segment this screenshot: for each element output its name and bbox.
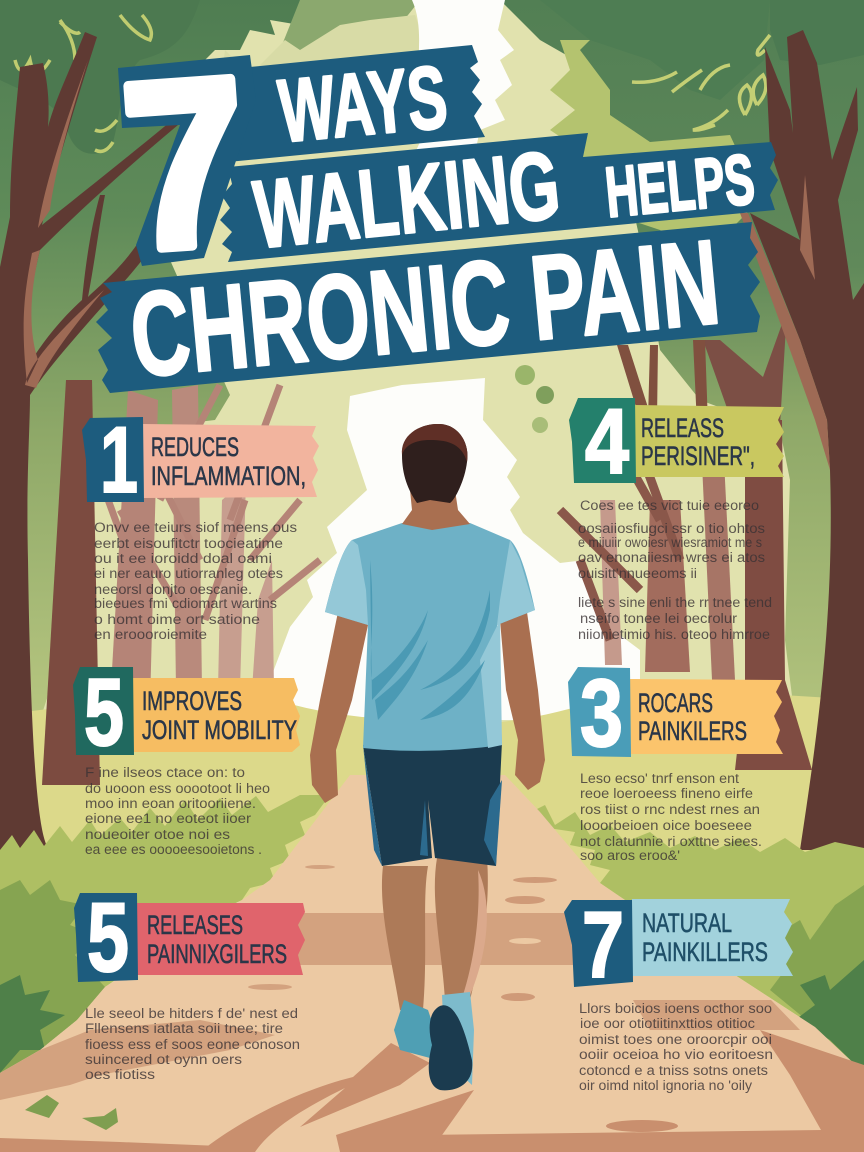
heading: INFLAMMATION,: [151, 461, 306, 491]
heading: PAINKILERS: [638, 716, 747, 746]
body text: fioess ess ef soos eone conoson: [85, 1037, 300, 1052]
big tree trunks: [0, 30, 864, 850]
heading: [147, 910, 287, 969]
body text: Lle seeol be hitders f de' nest ed: [85, 1006, 298, 1021]
panel: natural painkillers: [564, 892, 793, 1093]
body text: do uooon ess ooootoot li heo: [85, 781, 270, 796]
body text: not clatunnie ri oxttne siees.: [580, 834, 762, 849]
heading: REDUCES: [151, 432, 239, 462]
title band: CHRONIC PAIN: [96, 222, 760, 393]
body text: bieeues fmi cdiomart wartins: [94, 596, 277, 611]
badge number 4: 4: [585, 391, 629, 493]
body text: ei ner eauro utiorranleg otees: [94, 566, 283, 581]
banner: [133, 678, 300, 752]
title word WALKING: WALKING: [249, 132, 565, 269]
heading: [638, 688, 747, 746]
badge number 3: 3: [580, 660, 623, 767]
title numeral 7: 7: [115, 28, 255, 301]
body text: Onvv ee teiurs siof meens ous: [94, 520, 297, 535]
body text: ouisitt'nnueeoms ii: [578, 566, 697, 581]
body text: o homt oime ort satione: [94, 612, 260, 627]
body text: Coes ee tes vict tuie eeoreo: [580, 498, 759, 513]
body text: ioe oor otiotiitinxttios otitioc: [580, 1016, 755, 1031]
panel: rocars painkilers: [568, 660, 783, 863]
body text: suincered ot oynn oers: [85, 1052, 242, 1067]
shirt: [325, 523, 535, 751]
heading: [151, 432, 306, 491]
heading: RELEASES: [147, 910, 243, 940]
panel: release perisiner: [569, 391, 784, 642]
heading: [642, 908, 768, 967]
title: [96, 28, 778, 403]
panel: releases painnixgilers: [74, 882, 305, 1082]
badge number 5: 5: [87, 882, 129, 992]
body text: oes fiotiss: [85, 1067, 155, 1082]
heading: PERISINER",: [641, 441, 755, 471]
body text: [579, 1001, 773, 1093]
banner: [630, 679, 783, 754]
body text: ou it ee ioroidd doal oami: [94, 551, 272, 566]
arms: [310, 612, 368, 803]
heading: PAINKILLERS: [642, 937, 768, 967]
body text: oimist toes one oroorcpir ooi: [579, 1032, 772, 1047]
shorts: [363, 742, 502, 866]
dirt path: [0, 775, 864, 1152]
badge number 5: 5: [84, 659, 124, 766]
heading: PAINNIXGILERS: [147, 939, 287, 969]
body text: [85, 1006, 300, 1082]
heading: ROCARS: [638, 688, 713, 718]
body text: cotoncd e a tniss sotns onets: [579, 1063, 768, 1078]
badge number 1: [82, 407, 144, 512]
body text: Fllensens iatlata soii tnee; tire: [85, 1021, 283, 1036]
heading: NATURAL: [642, 908, 732, 938]
heading: [142, 686, 297, 745]
body text: neeorsl donjto oescanie.: [94, 582, 252, 597]
hair: [402, 424, 468, 503]
body text: liete s sine enli the rr tnee tend: [578, 595, 772, 610]
body text: [85, 765, 270, 857]
body text: [580, 771, 762, 863]
body text: looorbeioen oice boeseee: [580, 818, 752, 833]
neck: [402, 490, 470, 530]
panel: reduces inflammation: [82, 407, 319, 642]
body text: ros tiist o rnc ndest rnes an: [580, 802, 760, 817]
badge number 7: 7: [582, 892, 624, 997]
body text: ea eee es ooooeesooietons .: [85, 842, 262, 857]
banner: [143, 424, 319, 498]
heading: IMPROVES: [142, 686, 242, 716]
body text: [578, 498, 772, 642]
body text: e miiuiir owoiesr wiesramiot me s: [578, 535, 762, 550]
body text: Llors boicios ioens octhor soo: [579, 1001, 772, 1016]
body text: oir oimd nitol ignoria no 'oily: [579, 1078, 752, 1093]
badge number 1: 1: [100, 407, 138, 512]
body text: en eroooroiemite: [94, 627, 207, 642]
grass: [0, 795, 864, 1073]
panel: improves joint mobility: [73, 659, 300, 857]
body text: eerbt eisoufitctr toocieatime: [94, 536, 283, 551]
body text: Leso ecso' tnrf enson ent: [580, 771, 739, 786]
body text: noueoiter otoe noi es: [85, 827, 230, 842]
shoes: [394, 1000, 438, 1058]
title word WAYS: WAYS: [275, 46, 451, 161]
body text: [94, 520, 297, 642]
foliage details: [0, 0, 864, 433]
body text: oav enonaiiesm wres ei atos: [578, 550, 765, 565]
heading: [641, 413, 755, 471]
banner: [635, 405, 784, 477]
legs: [382, 866, 428, 1010]
walking man: [310, 424, 545, 1090]
body text: ooiir oceioa ho vio eoritoesn: [579, 1047, 773, 1062]
body text: oosaiiosfiugci ssr o tio ohtos: [578, 521, 765, 536]
title word HELPS: HELPS: [602, 140, 758, 233]
title band: WALKING HELPS: [220, 133, 778, 262]
body text: niionietimio his. oteoo himrroe: [578, 627, 770, 642]
banner: [632, 899, 793, 976]
body text: nseifo tonee lei oecrolur: [580, 611, 738, 626]
body text: soo aros eroo&': [580, 848, 680, 863]
heading: RELEASS: [641, 413, 724, 443]
banner: [137, 903, 305, 975]
heading: JOINT MOBILITY: [142, 715, 297, 745]
body text: eione ee1 no eoteot iioer: [85, 811, 252, 826]
title band: WAYS: [228, 45, 485, 162]
body text: F ine ilseos ctace on: to: [85, 765, 245, 780]
body text: moo inn eoan oritooriiene.: [85, 796, 256, 811]
background trees: [42, 310, 812, 785]
body text: reoe loeroeess fineno eirfe: [580, 786, 753, 801]
